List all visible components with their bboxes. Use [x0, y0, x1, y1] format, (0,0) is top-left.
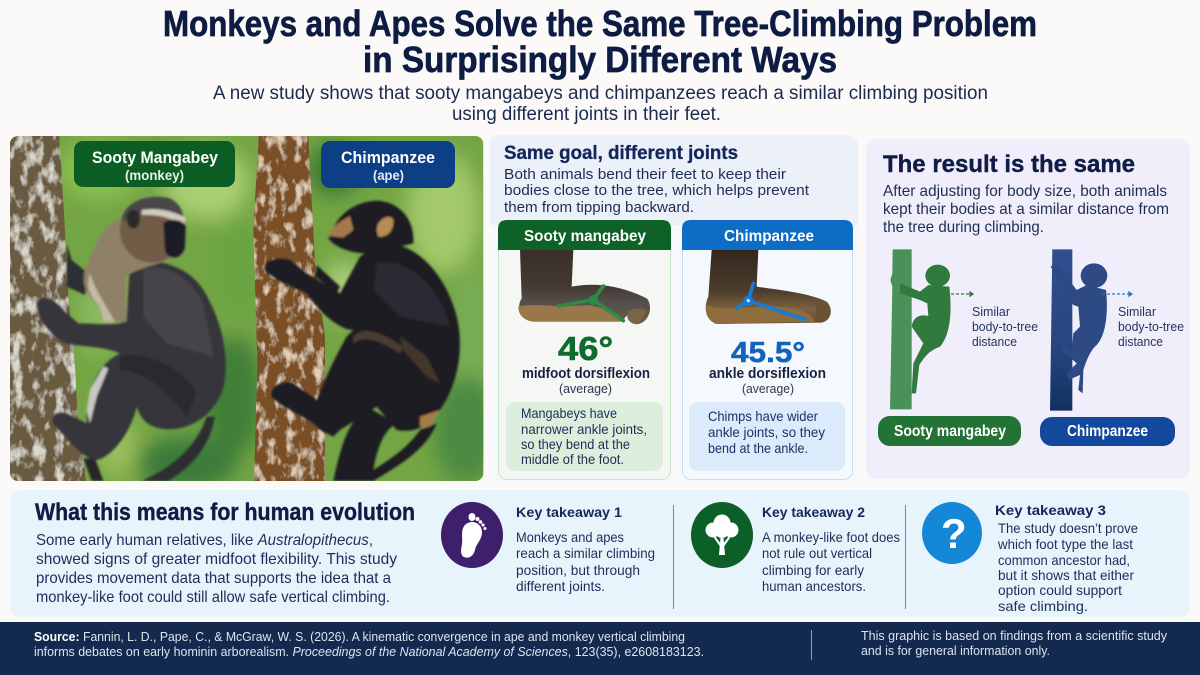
takeaway 2: not rule out vertical	[762, 545, 872, 561]
takeaway 1	[441, 502, 655, 594]
label: Sooty Mangabey: Sooty Mangabey	[92, 148, 218, 167]
value: 46 degrees: 46°	[558, 330, 613, 367]
takeaway 1: position, but through	[516, 562, 640, 578]
disclaimer	[861, 629, 1168, 658]
card: sooty mangabey: Sooty mangabey	[524, 228, 646, 245]
label: midfoot dorsiflexion: midfoot dorsiflexion	[522, 366, 650, 382]
takeaway 3: The study doesn’t prove	[998, 520, 1138, 536]
panel: climbing photos	[10, 136, 500, 490]
source citation	[34, 630, 704, 659]
takeaway 2	[691, 502, 900, 594]
callout: mangabey	[506, 402, 663, 471]
takeaway 2: climbing for early	[762, 562, 864, 578]
foot: chimpanzee	[706, 250, 831, 324]
arrow: mangabey distance	[951, 292, 973, 296]
value: 45.5 degrees: 45.5°	[731, 337, 805, 369]
disclaimer: This graphic is based on findings from a scientific study	[861, 629, 1168, 643]
intro text: Both animals bend their feet to keep their	[504, 166, 786, 183]
note: average: (average)	[559, 382, 612, 396]
label: similar distance mangabey	[972, 304, 1038, 349]
source citation: Source: Fannin, L. D., Pape, C., & McGraw, W. S. (2026). A kinematic convergence in ape and monkey vertical climbing	[34, 630, 685, 644]
label: similar distance chimpanzee: distance	[1118, 334, 1163, 349]
takeaway 1: different joints.	[516, 578, 605, 594]
arrow: chimpanzee distance	[1102, 292, 1132, 296]
chimpanzee	[265, 201, 460, 481]
source citation: informs debates on early hominin arborealism. Proceedings of the National Academy of Sciences, 123(35), e2608183123.	[34, 645, 704, 659]
result text: kept their bodies at a similar distance from	[883, 201, 1169, 218]
label: similar distance chimpanzee: Similar	[1118, 304, 1157, 319]
pill: sooty mangabey	[878, 416, 1021, 446]
title: Monkeys and Apes Solve the Same Tree-Climbing Problem	[163, 3, 1037, 44]
takeaway 3: safe climbing.	[998, 598, 1088, 614]
card: sooty mangabey	[498, 220, 671, 480]
label: similar distance chimpanzee	[1118, 304, 1184, 349]
panel: the result is the same	[866, 139, 1190, 479]
callout: mangabey: middle of the foot.	[521, 451, 624, 467]
human evolution text	[36, 532, 397, 606]
human evolution text: provides movement data that supports the idea that a	[36, 570, 391, 587]
icon: tree	[691, 502, 753, 568]
subtitle: A new study shows that sooty mangabeys and chimpanzees reach a similar climbing position	[213, 83, 988, 104]
mangabey	[37, 197, 226, 481]
callout: mangabey: so they bend at the	[521, 436, 630, 452]
pill: sooty mangabey: Sooty mangabey	[894, 423, 1006, 440]
label: similar distance mangabey: distance	[972, 334, 1017, 349]
pill: chimpanzee: Chimpanzee	[1067, 423, 1148, 440]
label: similar distance chimpanzee: body-to-tree	[1118, 319, 1184, 334]
icon: question mark	[922, 502, 982, 564]
subtitle	[213, 83, 988, 125]
foot: mangabey	[518, 250, 650, 324]
footer	[0, 622, 1200, 675]
intro text: them from tipping backward.	[504, 199, 694, 216]
panel: same goal, different joints	[490, 135, 858, 483]
takeaway 3: option could support	[998, 582, 1122, 598]
tree trunk right	[253, 136, 325, 481]
pill: chimpanzee	[1040, 417, 1175, 446]
disclaimer: and is for general information only.	[861, 644, 1050, 658]
icon: question mark: ?	[941, 510, 967, 557]
label: Sooty Mangabey: (monkey)	[125, 168, 184, 183]
title	[163, 3, 1037, 80]
callout: chimpanzee	[689, 402, 845, 471]
label: ankle dorsiflexion: ankle dorsiflexion	[709, 366, 826, 382]
silhouette: mangabey on tree	[890, 249, 951, 409]
result text: the tree during climbing.	[883, 219, 1044, 236]
label: Chimpanzee: (ape)	[373, 168, 404, 183]
takeaway 2: Key takeaway 2	[762, 504, 865, 520]
takeaway 2: human ancestors.	[762, 578, 866, 594]
callout: chimpanzee: bend at the ankle.	[708, 440, 808, 456]
icon: footprint	[441, 502, 503, 568]
callout: mangabey: narrower ankle joints,	[521, 421, 647, 437]
silhouette: chimpanzee on tree	[1050, 249, 1107, 411]
result text	[883, 183, 1169, 236]
title: in Surprisingly Different Ways	[363, 39, 837, 80]
card: chimpanzee: Chimpanzee	[724, 228, 814, 245]
callout: chimpanzee: ankle joints, so they	[708, 424, 825, 440]
tree trunk left	[10, 136, 86, 481]
human evolution text: showed signs of greater midfoot flexibility. This study	[36, 551, 397, 568]
takeaway 3: common ancestor had,	[998, 552, 1130, 568]
card: chimpanzee	[682, 220, 853, 480]
subtitle: using different joints in their feet.	[452, 104, 721, 125]
label: Chimpanzee	[321, 141, 455, 188]
callout: chimpanzee: Chimps have wider	[708, 408, 818, 424]
heading: human evolution: What this means for human evolution	[35, 499, 415, 526]
result text: After adjusting for body size, both animals	[883, 183, 1167, 200]
forest background	[10, 136, 500, 490]
takeaway 3: which foot type the last	[997, 536, 1133, 552]
takeaway 1: reach a similar climbing	[516, 545, 655, 561]
takeaway 1: Monkeys and apes	[516, 529, 624, 545]
note: average: (average)	[742, 382, 794, 396]
takeaway 2: A monkey-like foot does	[762, 529, 900, 545]
panel: human evolution and takeaways	[10, 490, 1190, 617]
label: Sooty Mangabey	[74, 141, 235, 187]
intro text	[504, 166, 810, 216]
takeaway 3	[922, 502, 1138, 614]
label: Chimpanzee: Chimpanzee	[341, 148, 435, 167]
human evolution text: monkey-like foot could still allow safe vertical climbing.	[36, 589, 390, 606]
heading: same goal: Same goal, different joints	[504, 142, 738, 164]
label: similar distance mangabey: body-to-tree	[972, 319, 1038, 334]
label: similar distance mangabey: Similar	[972, 304, 1011, 319]
takeaway 3: Key takeaway 3	[995, 502, 1106, 518]
takeaway 3: but it shows that either	[998, 567, 1134, 583]
takeaway 1: Key takeaway 1	[516, 504, 622, 520]
intro text: bodies close to the tree, which helps prevent	[504, 182, 810, 199]
human evolution text: Some early human relatives, like Australopithecus,	[36, 532, 373, 549]
heading: result: The result is the same	[883, 151, 1135, 178]
callout: mangabey: Mangabeys have	[521, 405, 617, 421]
